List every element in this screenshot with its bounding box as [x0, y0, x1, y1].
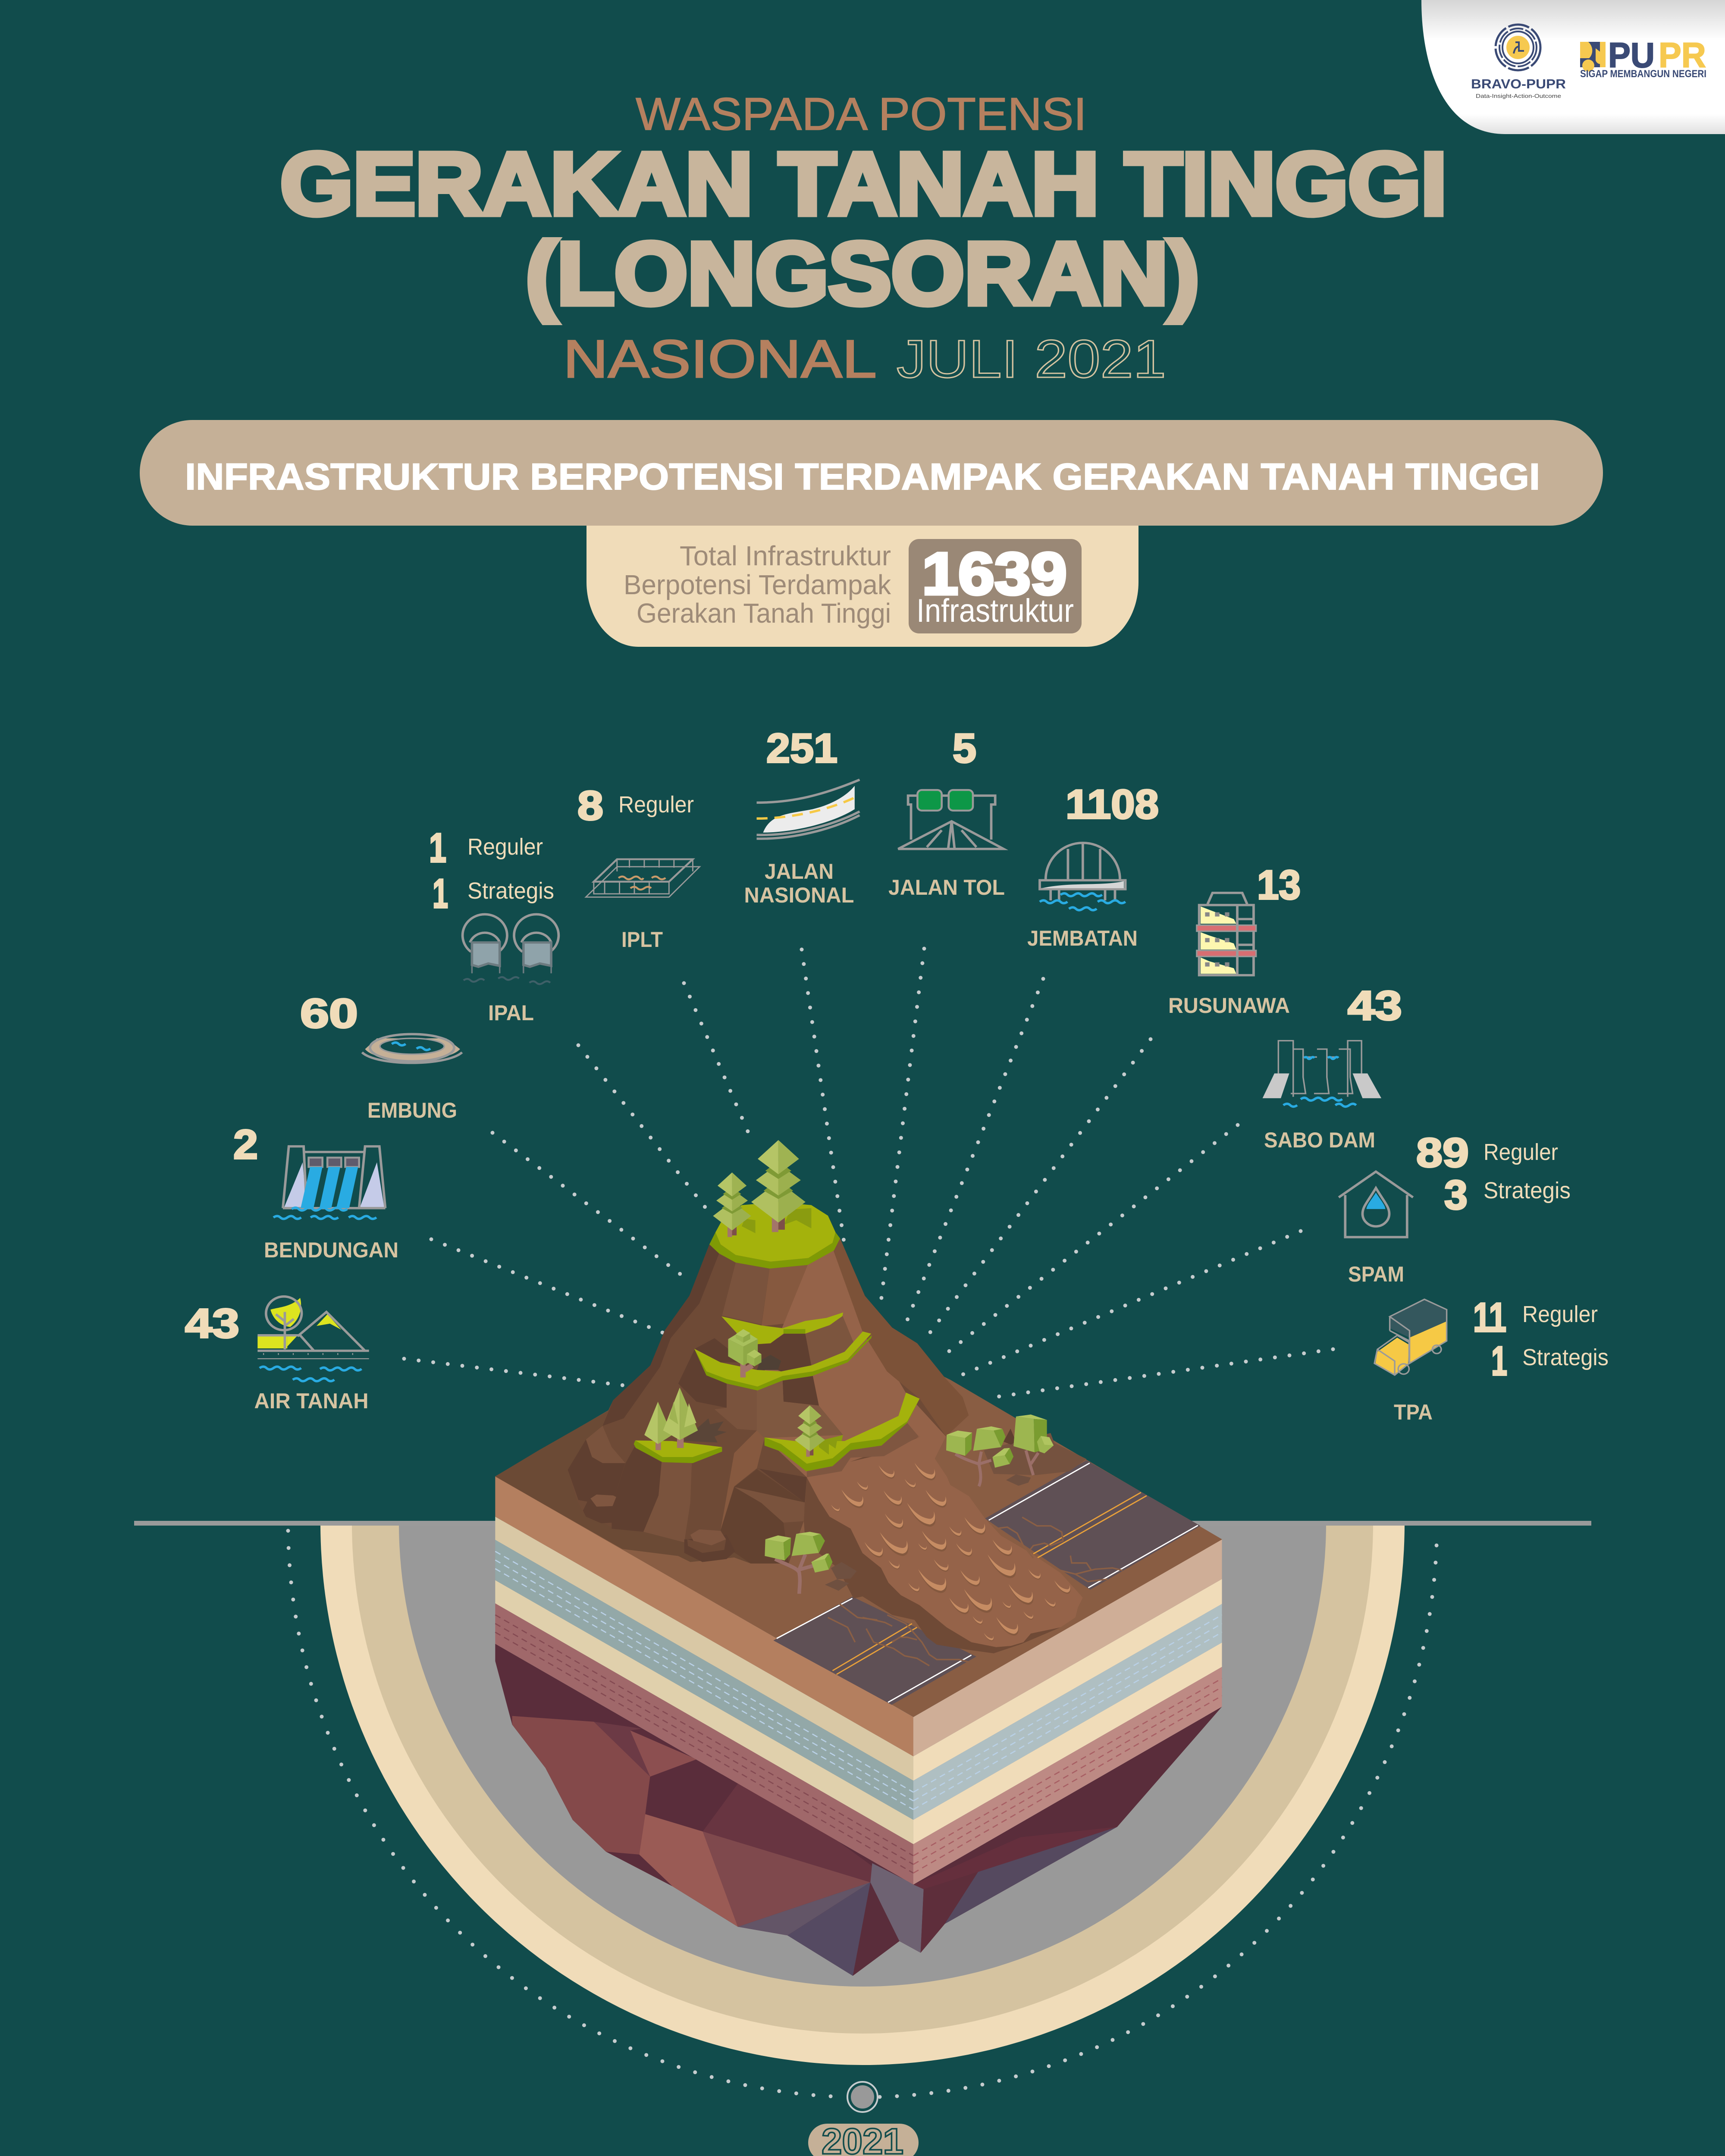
- logo: PUPR: PU: [1608, 36, 1655, 75]
- data: tpa: Reguler: [1522, 1301, 1598, 1327]
- title block: (LONGSORAN): [526, 224, 1199, 323]
- heading pill: [140, 420, 1603, 526]
- summit pine trees: [713, 1140, 806, 1237]
- right ground patch and rocks: [984, 1433, 1086, 1475]
- icon: embung: [362, 1034, 462, 1063]
- data: sabo dam: SABO DAM: [1264, 1128, 1375, 1152]
- data: spam: [1348, 1130, 1571, 1286]
- data: jalan tol: [888, 725, 1005, 899]
- data: air tanah: 43: [185, 1300, 239, 1347]
- horizon line: [134, 1521, 1591, 1526]
- data: spam: 3: [1444, 1172, 1468, 1218]
- icon: IPAL: [463, 914, 558, 984]
- title block: [280, 88, 1447, 389]
- block tree: right 2: [1013, 1414, 1054, 1475]
- data: embung: 60: [300, 990, 358, 1037]
- data: embung: EMBUNG: [367, 1098, 457, 1122]
- logo: PUPR: PR: [1659, 36, 1706, 75]
- logo: BRAVO-PUPR: Data-Insight-Action-Outcome: [1476, 93, 1561, 99]
- logo: PUPR: SIGAP MEMBANGUN NEGERI: [1580, 68, 1706, 80]
- right face strata: [913, 1539, 1222, 1885]
- dotted orbit: [288, 1531, 1437, 2097]
- title block: JULI 2021: [897, 329, 1166, 389]
- block tree: terrace 2: [728, 1329, 781, 1378]
- data: jalan nasional: [744, 725, 854, 907]
- data: jalan tol: JALAN TOL: [888, 875, 1005, 899]
- block tree: right 1: [946, 1426, 1013, 1486]
- icon: spam: [1339, 1172, 1413, 1237]
- icon: IPLT: [586, 859, 699, 897]
- data: IPAL: 1: [433, 871, 448, 917]
- data: air tanah: [185, 1300, 368, 1413]
- icon: jalan nasional: [757, 780, 859, 839]
- left face strata: [495, 1476, 913, 1885]
- data: tpa: TPA: [1394, 1400, 1433, 1424]
- summit grass: [709, 1202, 840, 1269]
- data: jembatan: [1027, 781, 1159, 950]
- logo: BRAVO-PUPR: [1471, 25, 1566, 99]
- data: rusunawa: RUSUNAWA: [1168, 993, 1290, 1018]
- data: jembatan: JEMBATAN: [1027, 926, 1138, 950]
- data: spam: 89: [1416, 1130, 1469, 1176]
- semicircle rings: [320, 1526, 1405, 2065]
- data: IPLT: 8: [577, 783, 603, 829]
- data: jalan nasional: 251: [766, 725, 837, 771]
- title block: NASIONAL: [563, 329, 877, 389]
- dotted connector lines: [404, 949, 1333, 1398]
- panel: total count tab: [586, 517, 1138, 647]
- icon: air tanah: [257, 1297, 369, 1381]
- conifers on ledge: [644, 1388, 698, 1450]
- underside rock: [495, 1644, 1222, 1976]
- data: IPAL: Reguler: [467, 834, 543, 860]
- total number badge: 1639: [922, 541, 1067, 607]
- terrace 2: [694, 1332, 872, 1391]
- landslide body: [807, 1436, 1083, 1647]
- data: IPAL: Strategis: [467, 878, 554, 904]
- title block: GERAKAN TANAH TINGGI: [280, 135, 1447, 233]
- data: tpa: Strategis: [1522, 1344, 1609, 1370]
- ground surface: [495, 1337, 1222, 1717]
- icon: jembatan: [1040, 843, 1126, 910]
- right infrastructure icons (drawn in local grid): [898, 790, 1447, 1375]
- data: spam: Strategis: [1484, 1178, 1571, 1203]
- upper details: [583, 1140, 919, 1594]
- terrace 3: [765, 1393, 919, 1471]
- panel: total count tab: Berpotensi Terdampak: [624, 569, 891, 600]
- icon: jalan tol: [898, 790, 1004, 849]
- landslide: [804, 1414, 1123, 1666]
- boulder: left: [583, 1495, 616, 1523]
- data: IPLT: Reguler: [618, 792, 694, 818]
- left infrastructure icons (drawn in local grid): [257, 780, 859, 1381]
- data: jalan nasional: NASIONAL: [744, 883, 854, 907]
- logo panel: [1421, 0, 1725, 134]
- icon: bendungan: [273, 1147, 386, 1219]
- data: spam: SPAM: [1348, 1262, 1404, 1286]
- data: jembatan: 1108: [1066, 781, 1159, 827]
- data: embung: [300, 990, 457, 1122]
- logo: BRAVO-PUPR: BRAVO-PUPR: [1471, 76, 1566, 91]
- data: bendungan: 2: [233, 1122, 258, 1168]
- timeline: node 2021: [847, 2082, 878, 2112]
- icon: sabo dam: [1263, 1040, 1381, 1106]
- landslide scale marks: [831, 1463, 1070, 1641]
- data: rusunawa: [1168, 862, 1301, 1018]
- terrace shadow: [807, 1423, 919, 1477]
- data: tpa: 11: [1473, 1294, 1506, 1341]
- data: IPLT: IPLT: [621, 928, 663, 952]
- pine on terrace 3: [795, 1405, 825, 1457]
- illustration: isometric landslide island: [495, 1140, 1222, 1976]
- data: tpa: [1394, 1294, 1609, 1424]
- underside rock and strata: [495, 1476, 1222, 1976]
- title block: WASPADA POTENSI: [636, 88, 1087, 140]
- total number badge: [909, 539, 1082, 633]
- block tree: foreground: [765, 1532, 857, 1594]
- data: IPAL: 1: [429, 825, 446, 871]
- icon: tpa: [1374, 1299, 1447, 1375]
- logo: PUPR: [1580, 36, 1706, 80]
- landslide shadow: [804, 1436, 1060, 1653]
- data: jalan tol: 5: [953, 725, 976, 771]
- panel: total count tab: Total Infrastruktur: [680, 540, 891, 571]
- mountain silhouette: [568, 1238, 969, 1564]
- data: tpa: 1: [1491, 1338, 1507, 1384]
- data: sabo dam: [1264, 983, 1402, 1152]
- data: bendungan: BENDUNGAN: [264, 1238, 398, 1262]
- icon: rusunawa: [1197, 893, 1256, 975]
- data: jalan nasional: JALAN: [765, 859, 834, 884]
- data: spam: Reguler: [1484, 1139, 1558, 1165]
- road cracks: [828, 1517, 1123, 1666]
- roads: [773, 1460, 1201, 1705]
- panel: total count tab: Gerakan Tanah Tinggi: [637, 598, 891, 629]
- mountain: [495, 1238, 969, 1564]
- data: IPLT: [577, 783, 694, 952]
- data: air tanah: AIR TANAH: [254, 1389, 368, 1413]
- data: bendungan: [233, 1122, 398, 1262]
- heading pill: INFRASTRUKTUR BERPOTENSI TERDAMPAK GERAKAN TANAH TINGGI: [185, 456, 1540, 498]
- terrace 4: [634, 1418, 727, 1463]
- data: IPAL: [429, 825, 554, 1025]
- boulder: front: [684, 1529, 735, 1562]
- data: rusunawa: 13: [1257, 862, 1301, 908]
- terrace 1: [721, 1313, 843, 1344]
- rear-left ground: [495, 1406, 789, 1564]
- data: IPAL: IPAL: [488, 1001, 534, 1025]
- road: front: [773, 1597, 976, 1705]
- data: sabo dam: 43: [1348, 983, 1402, 1029]
- total number badge: Infrastruktur: [916, 592, 1074, 629]
- road: back: [985, 1460, 1201, 1590]
